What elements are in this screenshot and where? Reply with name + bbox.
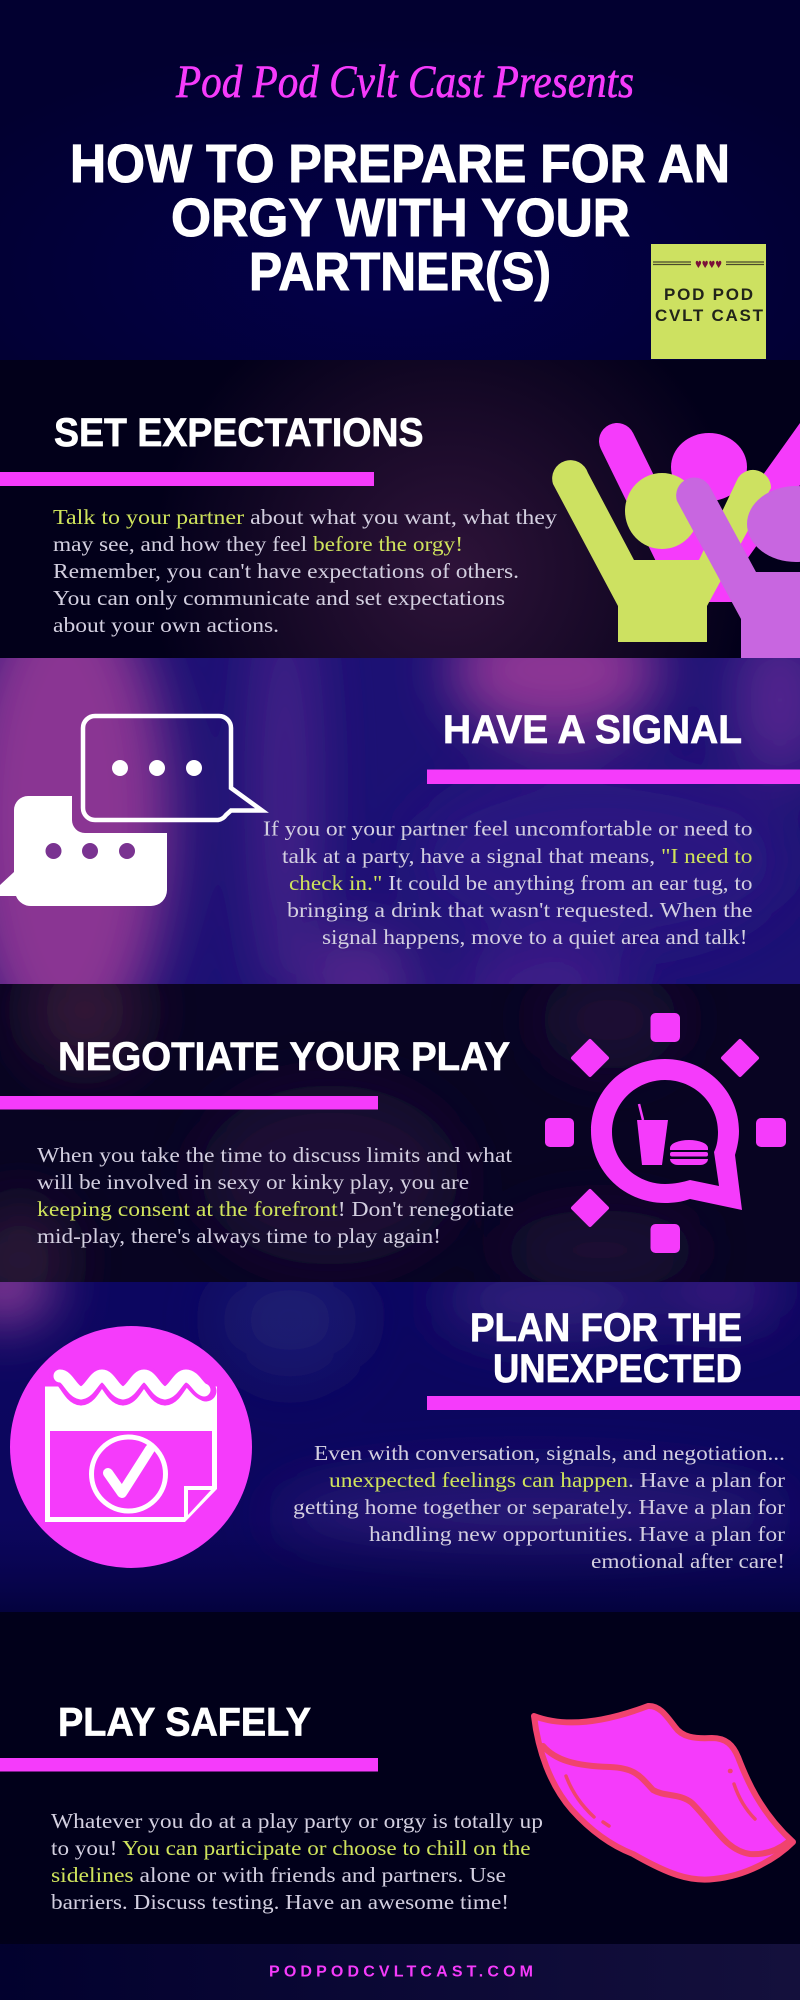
body text [51,1809,543,1914]
body text: handling new opportunities. Have a plan for [369,1522,785,1546]
heading bar [0,472,374,486]
icon: group of raised-arm figures [552,412,800,658]
body text: may see, and how they feel before the orgy! [53,532,463,556]
panel: play safely [0,1612,800,1944]
panel: header [0,0,800,360]
heading bar [427,770,800,784]
heading: set expectations: SET EXPECTATIONS [54,411,424,455]
logo: Pod Pod Cvlt Cast: CVLT CAST [655,306,764,325]
body text: mid-play, there's always time to play again! [37,1224,441,1248]
icon: speech ring with food and rays [545,1013,786,1253]
heading bar [0,1758,378,1772]
body text: Talk to your partner about what you want, what they [53,505,558,529]
body text: check in." It could be anything from an ear tug, to [289,871,752,895]
heading: have a signal: HAVE A SIGNAL [443,708,742,752]
heading: plan for the unexpected: UNEXPECTED [493,1347,742,1391]
body text [293,1441,785,1573]
title: PARTNER(S) [249,242,551,302]
body text: You can only communicate and set expectations [53,586,505,610]
heading: negotiate your play: NEGOTIATE YOUR PLAY [58,1035,510,1079]
panel: footer [0,1944,800,2000]
title [70,134,730,302]
body text: emotional after care! [591,1549,785,1573]
website url: PODPODCVLTCAST.COM [269,1964,533,1980]
logo: Pod Pod Cvlt Cast [651,244,766,359]
body text: unexpected feelings can happen . Have a plan for [329,1468,785,1492]
panel: have a signal [0,658,800,984]
heading: plan for the unexpected [470,1306,742,1391]
body text: When you take the time to discuss limits and what [37,1143,512,1167]
panel: negotiate your play [0,984,786,1282]
title: ORGY WITH YOUR [171,188,630,248]
body text: to you! You can participate or choose to chill on the [51,1836,531,1860]
body text [263,816,752,949]
body text: Remember, you can't have expectations of others. [53,559,519,583]
body text: signal happens, move to a quiet area and talk! [322,925,748,949]
title: HOW TO PREPARE FOR AN [70,134,730,194]
heading: play safely: PLAY SAFELY [58,1700,311,1744]
heading bar [427,1396,800,1410]
body text: Even with conversation, signals, and negotiation... [314,1441,785,1465]
body text: keeping consent at the forefront ! Don't renegotiate [37,1197,514,1221]
body text [37,1143,514,1248]
icon: lips [534,1706,793,1880]
body text: getting home together or separately. Have a plan for [293,1495,785,1519]
body text: Whatever you do at a play party or orgy is totally up [51,1809,543,1833]
panel: plan for the unexpected [0,1282,800,1612]
icon: speech bubbles [0,716,262,906]
logo: Pod Pod Cvlt Cast: POD POD [664,285,753,304]
body text: talk at a party, have a signal that means, "I need to [282,844,752,868]
presents line: Pod Pod Cvlt Cast Presents [175,56,634,108]
body text: will be involved in sexy or kinky play, you are [37,1170,469,1194]
logo: Pod Pod Cvlt Cast: ♥♥♥♥ [695,260,722,271]
body text: sidelines alone or with friends and partners. Use [51,1863,506,1887]
body text: barriers. Discuss testing. Have an awesome time! [51,1890,509,1914]
panel: set expectations [0,360,800,658]
body text: If you or your partner feel uncomfortable or need to [263,816,752,840]
body text: bringing a drink that wasn't requested. When the [287,898,752,922]
icon: calendar with check mark in circle [10,1326,252,1568]
body text: about your own actions. [53,613,279,637]
heading bar [0,1096,378,1110]
body text [53,505,558,637]
heading: plan for the unexpected: PLAN FOR THE [470,1306,742,1350]
